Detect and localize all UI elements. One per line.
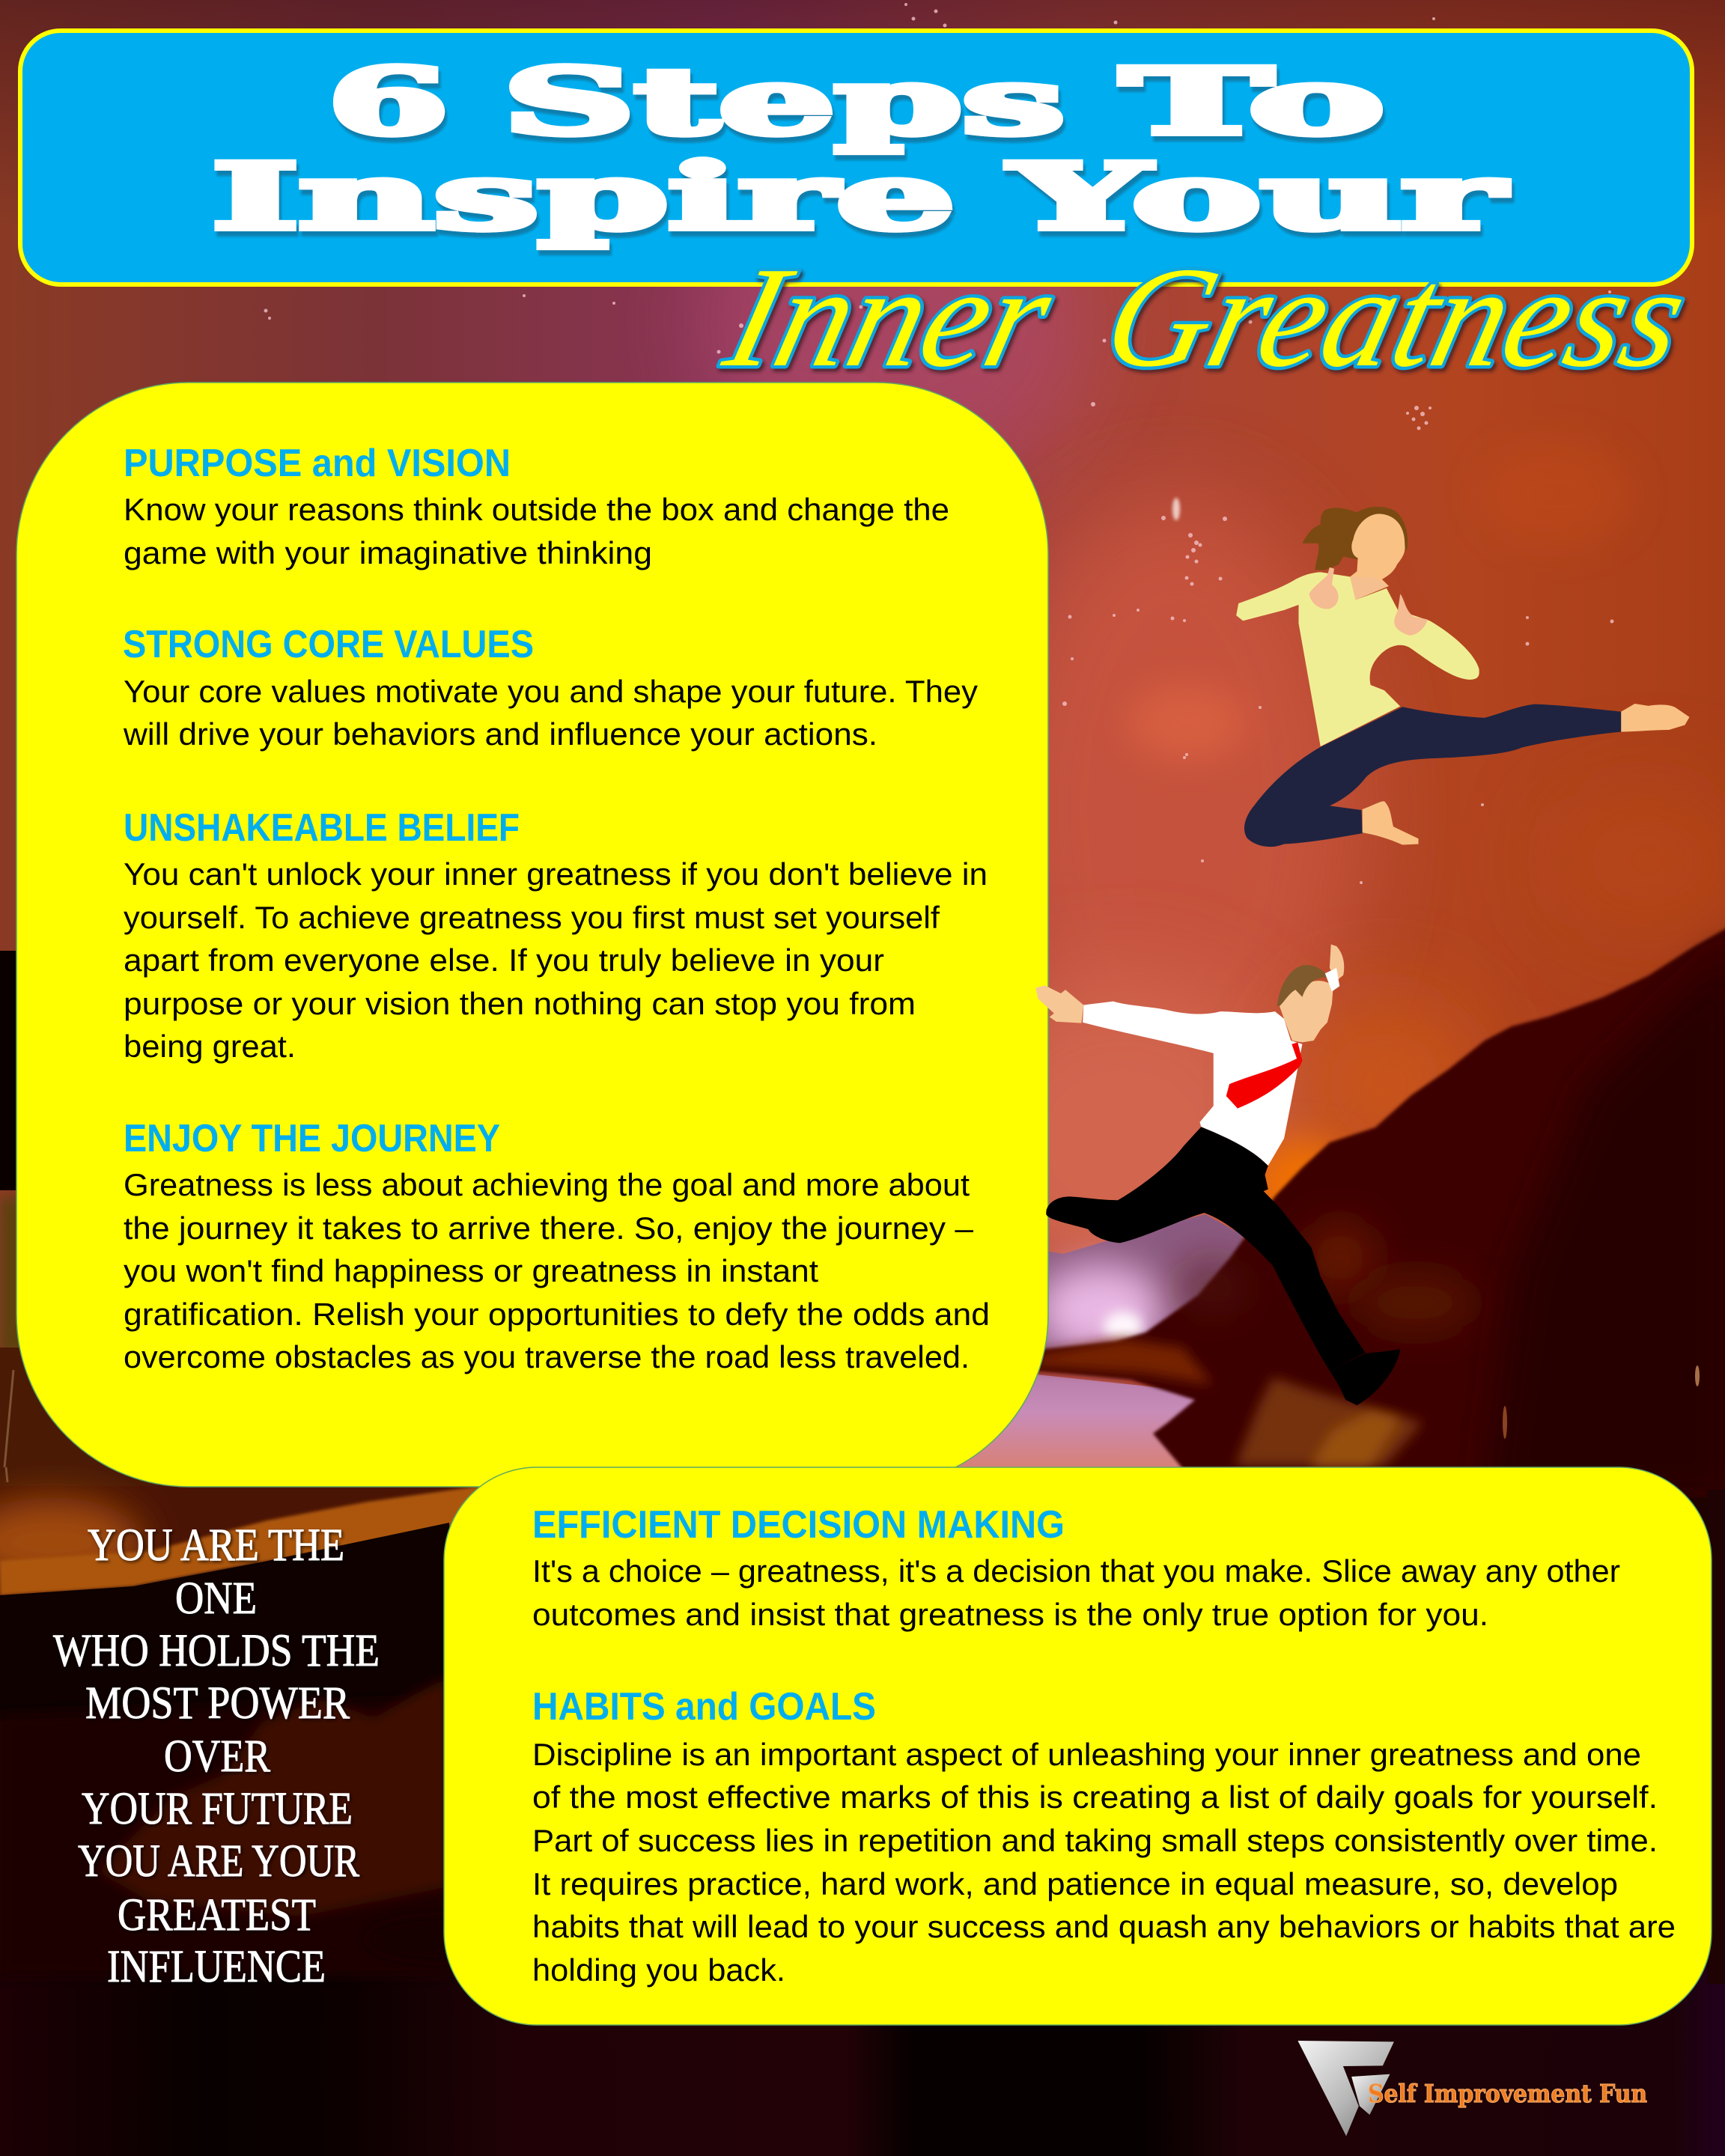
section: unshakeable belief: yourself. To achieve greatness you first must set yourself: [124, 900, 940, 935]
logo wordmark: Self Improvement Fun: [1368, 2079, 1647, 2108]
woman face and neck: [1350, 514, 1405, 600]
figure: jumping woman: [1236, 507, 1690, 847]
section: enjoy the journey: the journey it takes to arrive there. So, enjoy the journey –: [124, 1211, 974, 1246]
quote text: ONE: [175, 1574, 257, 1624]
dark lower scene: [0, 1497, 1725, 2156]
script subtitle: Inner: [711, 238, 1068, 397]
section: unshakeable belief: [124, 806, 988, 1064]
section: purpose and vision: PURPOSE and VISION: [124, 442, 511, 485]
quote text: OVER: [164, 1732, 270, 1782]
script subtitle: Greatness: [1091, 238, 1701, 397]
icon: silver F triangle: [1297, 2041, 1394, 2136]
woman chest: [1350, 576, 1387, 600]
woman hands: [1309, 567, 1428, 636]
section: efficient decision making: outcomes and insist that greatness is the only true option for you.: [532, 1597, 1488, 1632]
title banner: [20, 31, 1692, 284]
section: habits and goals: [532, 1685, 1676, 1988]
man trousers: [1046, 1127, 1365, 1371]
quote text: GREATEST: [118, 1890, 316, 1940]
section: unshakeable belief: apart from everyone else. If you truly believe in your: [124, 943, 884, 978]
section: efficient decision making: EFFICIENT DECISION MAKING: [532, 1503, 1065, 1547]
section: habits and goals: HABITS and GOALS: [532, 1685, 876, 1729]
section: unshakeable belief: purpose or your vision then nothing can stop you from: [124, 986, 916, 1021]
section: strong core values: [123, 623, 978, 752]
stars: [264, 3, 1614, 884]
section: habits and goals: holding you back.: [532, 1952, 785, 1988]
title text: To: [1121, 48, 1384, 155]
section: efficient decision making: [532, 1503, 1620, 1632]
section: habits and goals: habits that will lead to your success and quash any behaviors or habits that are: [532, 1909, 1676, 1944]
section: strong core values: Your core values motivate you and shape your future. They: [124, 674, 978, 709]
man hair: [1277, 965, 1329, 1006]
title text: Your: [1008, 143, 1506, 250]
man hands: [1035, 945, 1344, 1023]
section: purpose and vision: Know your reasons think outside the box and change the: [124, 492, 949, 527]
woman trousers: [1244, 704, 1621, 847]
man shoe: [1330, 1349, 1400, 1405]
woman hair: [1302, 507, 1408, 570]
section: unshakeable belief: being great.: [124, 1029, 296, 1064]
woman top: [1236, 572, 1479, 746]
quote text: YOU ARE THE: [88, 1520, 344, 1571]
section: enjoy the journey: gratification. Relish your opportunities to defy the odds and: [124, 1297, 990, 1332]
section: enjoy the journey: ENJOY THE JOURNEY: [124, 1117, 500, 1160]
title text: [212, 48, 1506, 250]
man shirt: [1083, 968, 1339, 1166]
section: habits and goals: of the most effective marks of this is creating a list of daily goals for yourself.: [532, 1779, 1658, 1815]
section: strong core values: STRONG CORE VALUES: [123, 623, 534, 666]
title text: Inspire: [212, 143, 955, 250]
script subtitle: [711, 238, 1701, 397]
title text: 6: [328, 48, 448, 155]
quote text: [53, 1520, 380, 1992]
quote text: WHO HOLDS THE: [53, 1626, 380, 1676]
section: enjoy the journey: [124, 1117, 990, 1374]
section: enjoy the journey: Greatness is less about achieving the goal and more about: [124, 1167, 970, 1202]
lake glow and distant hills: [958, 1214, 1243, 1467]
man face: [1280, 981, 1333, 1042]
logo: Self Improvement Fun: [1297, 2041, 1647, 2136]
section: purpose and vision: game with your imaginative thinking: [124, 535, 652, 570]
section: strong core values: will drive your behaviors and influence your actions.: [123, 716, 877, 752]
section: habits and goals: Discipline is an important aspect of unleashing your inner greatness and one: [532, 1737, 1641, 1772]
mountain: [1026, 922, 1725, 1505]
quote text: MOST POWER: [85, 1678, 350, 1729]
man red tie: [1226, 1042, 1302, 1109]
dark left slope and foreground: [0, 951, 464, 1190]
woman feet: [1363, 704, 1690, 845]
quote text: INFLUENCE: [107, 1942, 326, 1992]
panel: right yellow text panel: [444, 1467, 1712, 2025]
quote text: YOUR FUTURE: [82, 1784, 353, 1834]
section: purpose and vision: [124, 442, 949, 570]
quote text: YOU ARE YOUR: [78, 1836, 359, 1886]
section: enjoy the journey: overcome obstacles as you traverse the road less traveled.: [124, 1339, 970, 1374]
section: efficient decision making: It's a choice – greatness, it's a decision that you make. Slice away any other: [532, 1553, 1620, 1589]
figure: running man: [1035, 945, 1400, 1405]
title text: Steps: [503, 48, 1065, 155]
panel: left yellow text panel: [16, 383, 1048, 1487]
section: habits and goals: It requires practice, hard work, and patience in equal measure, so, develop: [532, 1866, 1618, 1901]
section: enjoy the journey: you won't find happiness or greatness in instant: [124, 1253, 818, 1288]
section: unshakeable belief: UNSHAKEABLE BELIEF: [124, 806, 520, 850]
section: unshakeable belief: You can't unlock your inner greatness if you don't believe in: [124, 856, 988, 892]
section: habits and goals: Part of success lies in repetition and taking small steps consistently over time.: [532, 1823, 1658, 1858]
